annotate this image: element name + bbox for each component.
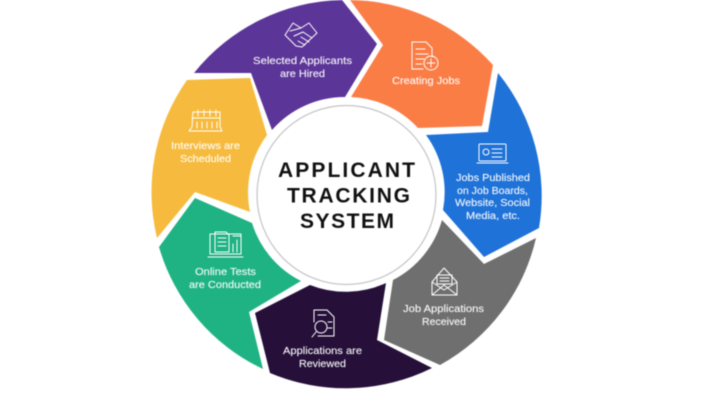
label: reviewed: Reviewed bbox=[299, 358, 346, 370]
panel: online tests bbox=[159, 198, 301, 369]
panel: selected applicants are hired bbox=[194, 0, 377, 130]
label: received: Received bbox=[422, 316, 466, 328]
title: SYSTEM bbox=[300, 210, 394, 233]
icon: calendar bbox=[189, 110, 222, 131]
title: TRACKING bbox=[287, 184, 410, 208]
label: applications are: Applications are bbox=[283, 345, 362, 357]
label: interviews are: Interviews are bbox=[171, 140, 240, 152]
icon: open envelope bbox=[432, 268, 457, 295]
label: scheduled: Scheduled bbox=[180, 153, 231, 165]
panel: creating jobs bbox=[350, 0, 493, 128]
panel: interviews scheduled bbox=[151, 78, 267, 238]
label: are hired: are Hired bbox=[280, 68, 325, 80]
center circle bbox=[257, 106, 436, 284]
label: selected applicants: Selected Applicants bbox=[253, 55, 352, 67]
label: online tests: Online Tests bbox=[195, 266, 256, 278]
icon: laptop bbox=[477, 144, 508, 163]
panel: applications reviewed bbox=[255, 283, 432, 388]
label: job applications: Job Applications bbox=[403, 303, 484, 315]
label: media etc: Media, etc. bbox=[466, 210, 520, 222]
label: are conducted: are Conducted bbox=[189, 279, 261, 291]
icon: document with magnifier bbox=[312, 310, 334, 337]
label: jobs published: Jobs Published bbox=[456, 172, 530, 184]
title bbox=[278, 159, 415, 233]
icon: handshake bbox=[285, 23, 317, 47]
title: APPLICANT bbox=[278, 159, 415, 182]
label: on job boards: on Job Boards, bbox=[457, 185, 528, 197]
panel: job applications received bbox=[384, 220, 536, 365]
icon: online test book bbox=[208, 232, 243, 257]
icon: document with plus bbox=[412, 42, 438, 70]
label: creating jobs: Creating Jobs bbox=[392, 75, 460, 87]
panel: jobs published bbox=[426, 73, 542, 257]
label: website social: Website, Social bbox=[455, 197, 530, 209]
